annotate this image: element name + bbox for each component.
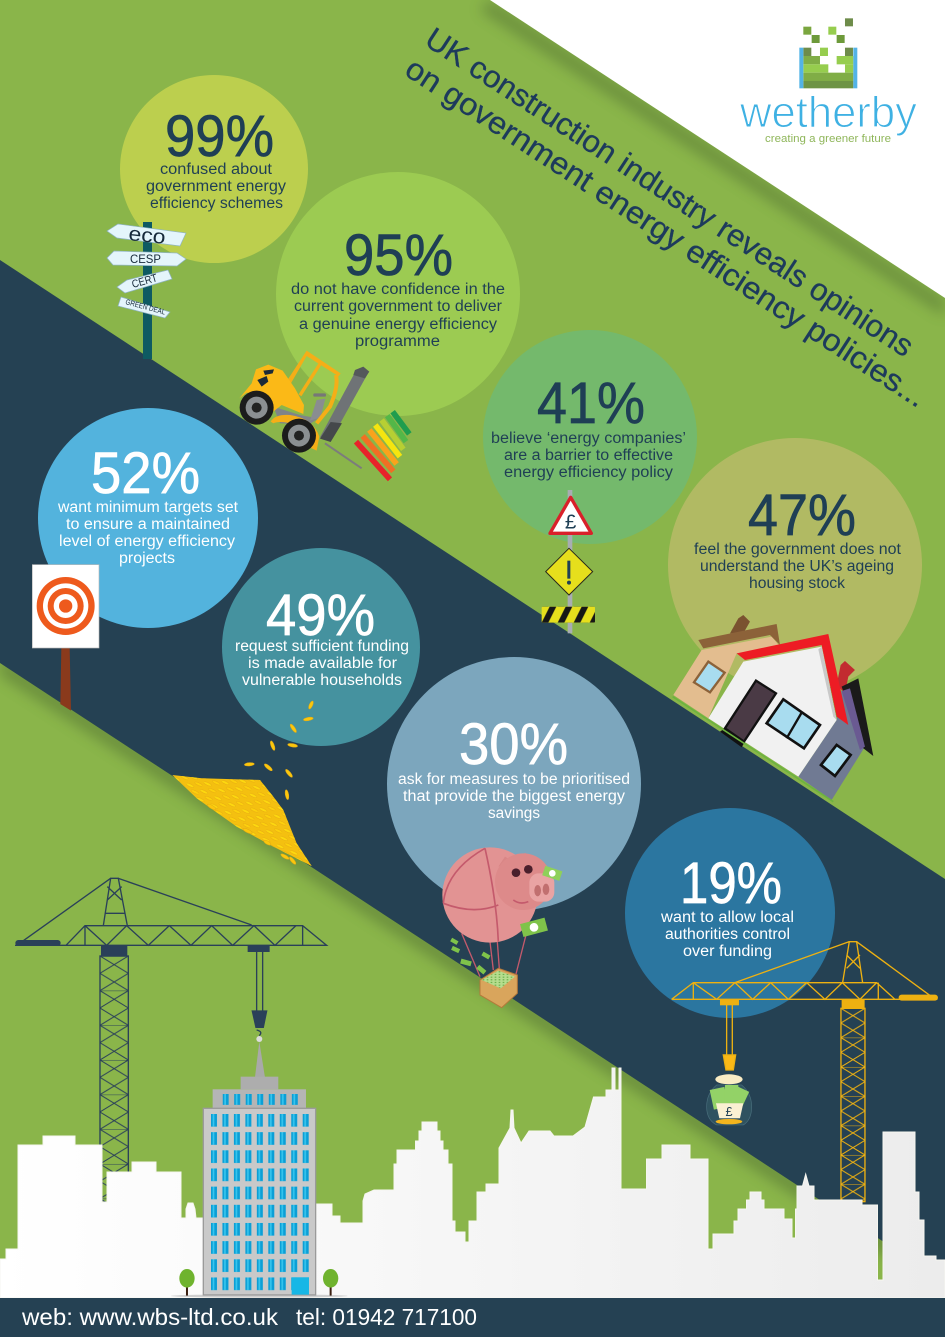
icon: signpost with scheme names: GREEN DEAL bbox=[124, 297, 166, 317]
stat: 30% bbox=[387, 657, 641, 911]
icon: jar of money: £ bbox=[725, 1105, 732, 1119]
stat: 19%: over funding bbox=[683, 943, 772, 960]
yellow tower crane bbox=[672, 942, 937, 1202]
stat: 52%: to ensure a maintained bbox=[66, 516, 230, 533]
icon: road signs: £ bbox=[565, 510, 577, 533]
icon: signpost with scheme names: CESP bbox=[130, 252, 161, 266]
stat: 47% bbox=[668, 438, 922, 692]
stat: 52%: 52% bbox=[91, 441, 200, 506]
icon: piggy hot-air balloon bbox=[442, 847, 562, 1008]
stat: 41%: 41% bbox=[537, 371, 645, 436]
stat: 30%: savings bbox=[488, 805, 540, 822]
title: on government energy efficiency policies... bbox=[399, 51, 933, 414]
icon: office tower on crane hook bbox=[171, 1036, 348, 1298]
stat: 99%: 99% bbox=[165, 104, 274, 169]
icon: target on a post bbox=[32, 565, 99, 711]
icon: tilted house bbox=[673, 615, 873, 802]
stat: 30%: ask for measures to be prioritised bbox=[398, 771, 630, 788]
stat: 41%: are a barrier to effective bbox=[504, 447, 673, 464]
stat: 99%: efficiency schemes bbox=[150, 195, 283, 212]
icon: signpost with scheme names: CERT bbox=[131, 272, 159, 291]
stat: 49%: 49% bbox=[266, 583, 375, 648]
stat: 95%: 95% bbox=[344, 223, 453, 288]
logo tagline: creating a greener future bbox=[765, 133, 891, 145]
icon: yellow forklift bbox=[239, 351, 369, 468]
stat: 49%: request sufficient funding bbox=[235, 638, 409, 655]
icon: signpost with scheme names: eco bbox=[127, 223, 167, 249]
stat: 41% bbox=[483, 330, 697, 544]
footer bar: web: www.wbs-ltd.co.uk bbox=[21, 1304, 279, 1330]
icon: left tree bbox=[179, 1269, 195, 1296]
stat: 99%: government energy bbox=[146, 178, 286, 195]
icon: energy rating bars bbox=[356, 412, 409, 479]
stat: 19%: authorities control bbox=[665, 926, 790, 943]
stat: 95%: current government to deliver bbox=[294, 298, 502, 315]
footer bar: tel: 01942 717100 bbox=[296, 1304, 477, 1330]
stat: 49%: is made available for bbox=[248, 655, 397, 672]
stat: 30%: that provide the biggest energy bbox=[403, 788, 625, 805]
dark diagonal band bbox=[0, 260, 945, 1282]
stat: 99% bbox=[120, 75, 308, 263]
stat: 95% bbox=[276, 172, 520, 416]
stat: 95%: programme bbox=[355, 333, 440, 350]
stat: 95%: do not have confidence in the bbox=[291, 281, 505, 298]
icon: signpost with scheme names bbox=[107, 222, 186, 359]
icon: road signs bbox=[542, 490, 595, 633]
title: UK construction industry reveals opinions bbox=[419, 21, 920, 364]
stat: 52% bbox=[38, 408, 258, 628]
logo: wetherby bbox=[739, 18, 917, 145]
stat: 52%: want minimum targets set bbox=[57, 499, 239, 516]
top right white corner bbox=[490, 0, 945, 298]
skyline bbox=[0, 1068, 945, 1298]
stat: 19%: want to allow local bbox=[660, 909, 794, 926]
stat: 49%: vulnerable households bbox=[242, 672, 402, 689]
stat: 47%: understand the UK’s ageing bbox=[700, 558, 894, 575]
stat: 47%: housing stock bbox=[749, 575, 845, 592]
stat: 47%: feel the government does not bbox=[694, 541, 902, 558]
stat: 49% bbox=[222, 548, 420, 746]
stat: 47%: 47% bbox=[748, 483, 856, 548]
logo mark: green pixels in a blue container bbox=[799, 18, 857, 88]
logo wordmark: wetherby bbox=[739, 88, 917, 137]
stat: 52%: level of energy efficiency bbox=[59, 533, 235, 550]
stat: 19%: 19% bbox=[680, 851, 782, 916]
footer bar bbox=[0, 1298, 945, 1337]
stat: 95%: a genuine energy efficiency bbox=[299, 316, 497, 333]
stat: 30%: 30% bbox=[459, 712, 568, 777]
dark tower crane bbox=[15, 878, 327, 1203]
stat: 41%: energy efficiency policy bbox=[504, 464, 673, 481]
stat: 99%: confused about bbox=[160, 161, 273, 178]
icon: right tree bbox=[323, 1269, 338, 1296]
icon: jar of money bbox=[707, 1074, 752, 1125]
stat: 41%: believe ‘energy companies’ bbox=[491, 430, 686, 447]
icon: pile of coins bbox=[172, 700, 314, 866]
stat: 19% bbox=[625, 808, 835, 1018]
stat: 52%: projects bbox=[119, 550, 175, 567]
